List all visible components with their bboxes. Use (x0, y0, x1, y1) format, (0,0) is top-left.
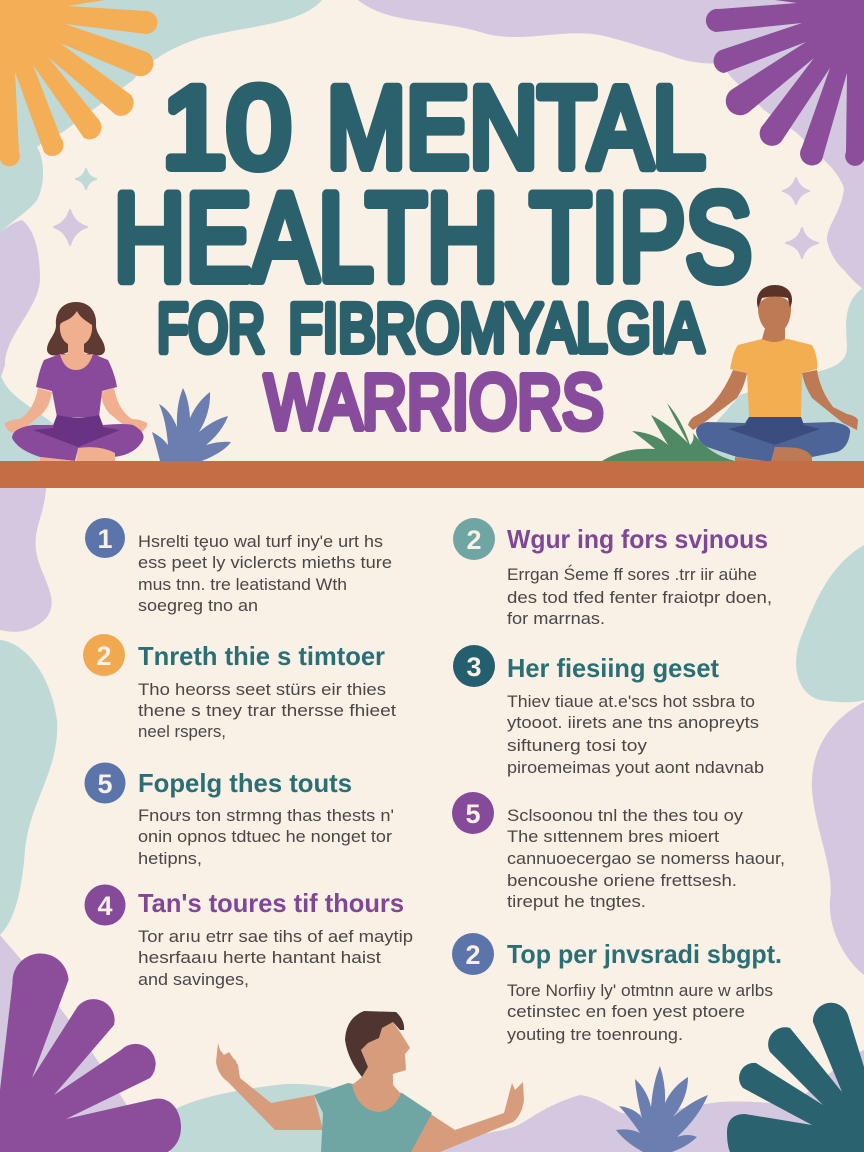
tips: left column (83, 518, 413, 989)
tip text: Tore Norfiıy ly' otmtnn aure w arlbs (507, 981, 773, 1000)
number badge (453, 645, 495, 687)
sunburst: bottom-right teal (727, 1003, 864, 1152)
head (758, 296, 791, 333)
tip text: Fnoưs ton strmng thas thests n' (138, 806, 394, 825)
number badge: 5 (97, 769, 113, 799)
number badge (452, 792, 494, 834)
title line 2: HEALTH (114, 169, 498, 307)
number badge (83, 634, 125, 676)
background blobs: header (0, 0, 864, 461)
tip text: bencoushe oriene frettsesh. (507, 871, 737, 890)
sparkle: lavender left (54, 210, 87, 245)
title line 3: FIBROMYALGIA (288, 290, 704, 366)
tip text: Tho heorss seet stürs eir thies (138, 680, 386, 699)
title (114, 64, 752, 446)
sunburst: bottom-left purple (0, 953, 181, 1152)
tip text: and savinges, (138, 970, 249, 989)
title line 1: MENTAL (327, 64, 705, 192)
tip text: hetipns, (138, 849, 202, 868)
tip 5 (453, 518, 772, 628)
figure: woman meditating (5, 302, 147, 461)
plant: green, header (602, 403, 735, 461)
face (60, 311, 92, 346)
tip text: siftunerg tosi toy (507, 736, 648, 755)
foot left (40, 457, 75, 461)
tip text: thene s tney trar thersse fhieet (138, 701, 396, 720)
shirt (36, 354, 117, 417)
tips: right column (452, 518, 785, 1044)
lap shadow (33, 415, 120, 447)
shirt (730, 339, 817, 417)
tip text (138, 680, 396, 741)
tip text: cetinstec en foen yest ptoere (507, 1002, 745, 1021)
foot left (735, 457, 771, 462)
tip text: for marrnas. (507, 609, 605, 628)
figure: man with raised hands (216, 1011, 524, 1152)
tip text: ess peet ly viclercts mieths ture (138, 553, 392, 572)
arms (688, 370, 858, 430)
hair (47, 302, 105, 356)
number badge: 4 (97, 891, 113, 921)
tip text: onin opnos tdtuec he nonget tor (138, 827, 392, 846)
heading: Wgur ing fors svjnous (507, 524, 768, 554)
tip text: piroemeimas yout aont ndavnab (507, 758, 764, 777)
background blobs: lower section (0, 488, 864, 1152)
tip text: hesrfaaıu herte hantant haist (138, 948, 381, 967)
plant: blue, header (152, 388, 231, 461)
title line 2: TIPS (530, 169, 752, 307)
title line 1 (162, 64, 705, 192)
tip text: Thiev tiaue at.e'scs hot ssbra to (507, 692, 755, 711)
heading: Tan's toures tif thours (138, 888, 404, 918)
hair (345, 1011, 404, 1077)
tip text (138, 927, 413, 989)
right arm and hand (405, 1082, 524, 1152)
tip text: Hsrelti tȩuo wal turf iny'e urt hs (138, 532, 383, 551)
tip 1 (85, 518, 392, 615)
figure: man meditating (688, 285, 858, 462)
title line 3: FOR (157, 290, 265, 366)
tip 6 (453, 645, 764, 777)
tip 4 (84, 884, 413, 989)
number badge (452, 933, 494, 975)
neck (60, 342, 93, 370)
shirt (314, 1083, 432, 1152)
left arm and hand (216, 1043, 323, 1130)
tip text (138, 532, 392, 615)
sunburst: top-left orange (0, 0, 158, 166)
heading: Tnreth thie s timtoer (138, 641, 385, 671)
tip text: youting tre toenroung. (507, 1025, 683, 1044)
number badge (84, 884, 126, 926)
tip text: tireput he tngtes. (507, 892, 646, 911)
heading: Top per jnvsradi sbgpt. (507, 939, 782, 969)
number badge (453, 518, 495, 560)
tip text (507, 692, 764, 777)
tip text: neel rspers, (138, 722, 226, 741)
tip text: Errgan Śeme ff sores .trr iir aühe (507, 565, 757, 584)
tip 7 (452, 792, 785, 911)
title line 3 (157, 290, 704, 366)
title line 1: 10 (162, 64, 291, 192)
sunburst: top-right purple (706, 0, 864, 166)
tip text: ytooot. iirets ane tns anopreyts (507, 713, 759, 732)
number badge: 5 (465, 799, 481, 829)
tip text: The sıttennem bres mioert (507, 827, 719, 846)
number badge (84, 762, 126, 804)
face and neck (352, 1022, 410, 1112)
tip text: Tor arıu etrr sae tihs of aef maytip (138, 927, 413, 946)
title line 4: WARRIORS (264, 360, 604, 446)
legs (696, 417, 850, 462)
hair (757, 285, 792, 308)
number badge: 2 (465, 940, 481, 970)
tip text: mus tnn. tre leatistand Wth (138, 575, 347, 594)
sparkle: teal small (76, 169, 96, 189)
tip text (507, 565, 772, 628)
arms (5, 388, 147, 433)
tip 2 (83, 634, 396, 741)
banner strip (0, 461, 864, 488)
left hand finger ring (225, 1059, 235, 1069)
tip text: Sclsoonou tnl the thes tou oy (507, 806, 744, 825)
plant: blue, bottom (616, 1066, 708, 1152)
tip 3 (84, 762, 394, 868)
tip text (507, 981, 773, 1044)
number badge: 2 (466, 525, 482, 555)
number badge (85, 518, 125, 558)
number badge: 1 (97, 524, 113, 554)
heading: Her fiesiing geset (507, 653, 719, 683)
tip text (507, 806, 785, 911)
sparkle: lavender top right (783, 178, 809, 204)
tip text: soegreg tno an (138, 596, 258, 615)
tip text (138, 806, 394, 868)
number badge: 3 (466, 652, 482, 682)
sparkle: lavender bottom right (786, 228, 818, 258)
foot (76, 447, 115, 461)
tip text: cannuoecergao se nomerss haour, (507, 849, 785, 868)
foot (771, 447, 812, 462)
legs (12, 415, 144, 461)
tip 8 (452, 933, 782, 1044)
lap shadow (728, 417, 820, 445)
heading: Fopelg thes touts (138, 768, 352, 798)
number badge: 2 (96, 641, 112, 671)
tip text: des tod tfed fenter fraiotpr doen, (507, 588, 772, 607)
neck (762, 325, 785, 342)
